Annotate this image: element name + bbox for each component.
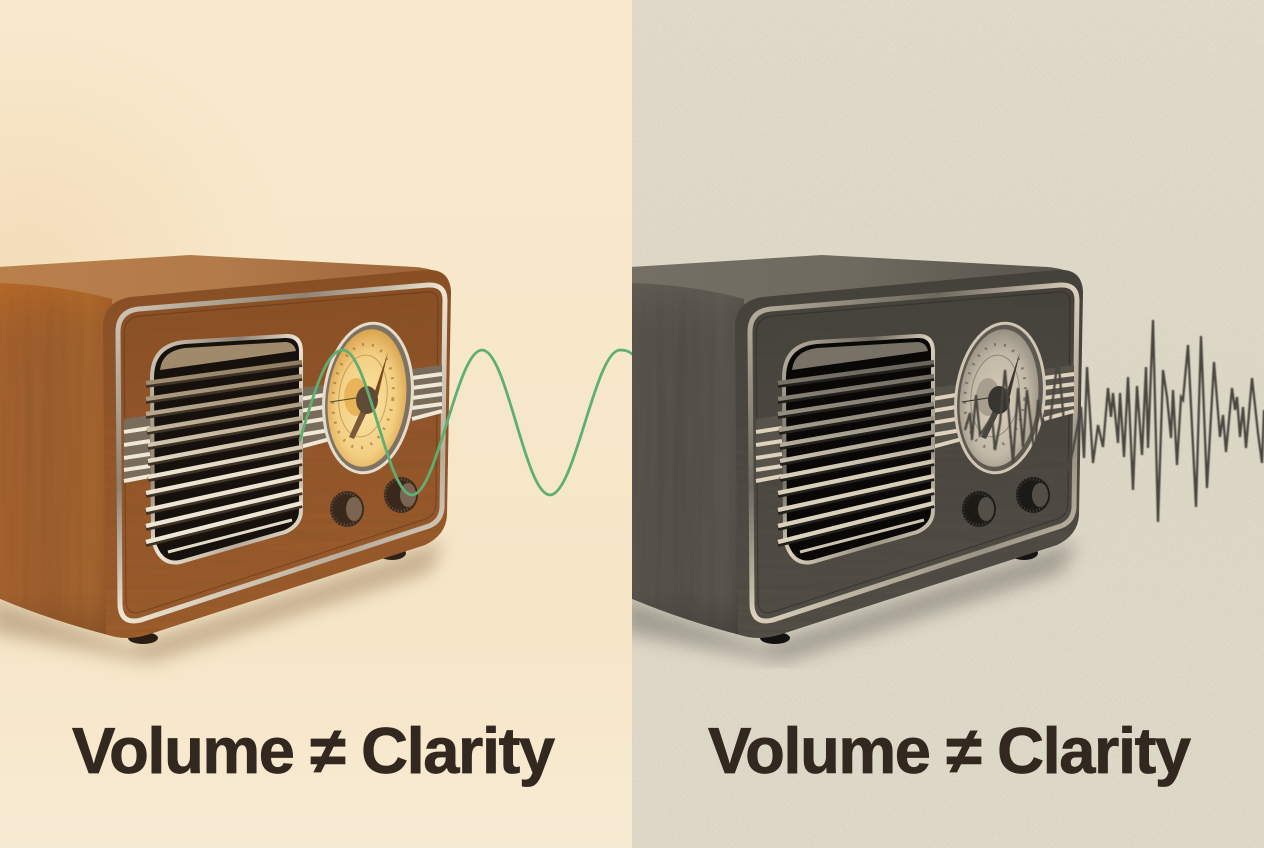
heading: right: Volume ≠ Clarity xyxy=(708,714,1191,787)
heading: left: Volume ≠ Clarity xyxy=(72,714,555,787)
panel: noisy radio xyxy=(622,0,1264,848)
radio: desaturated sepia xyxy=(630,255,1086,646)
tuning dial xyxy=(316,319,420,477)
panel: clear radio xyxy=(0,0,632,848)
green sine wave: clean signal xyxy=(300,350,632,495)
control knobs xyxy=(330,477,418,527)
speaker grille xyxy=(146,336,302,563)
radio: warm wood with gold dial xyxy=(0,255,454,646)
radio cabinet xyxy=(0,255,454,646)
chrome band xyxy=(756,365,1074,483)
speaker grille xyxy=(778,336,934,563)
chrome band xyxy=(124,365,442,483)
noisy jagged waveform xyxy=(965,320,1264,522)
control knobs xyxy=(962,477,1050,527)
tuning dial xyxy=(954,322,1046,474)
radio cabinet xyxy=(630,255,1086,646)
